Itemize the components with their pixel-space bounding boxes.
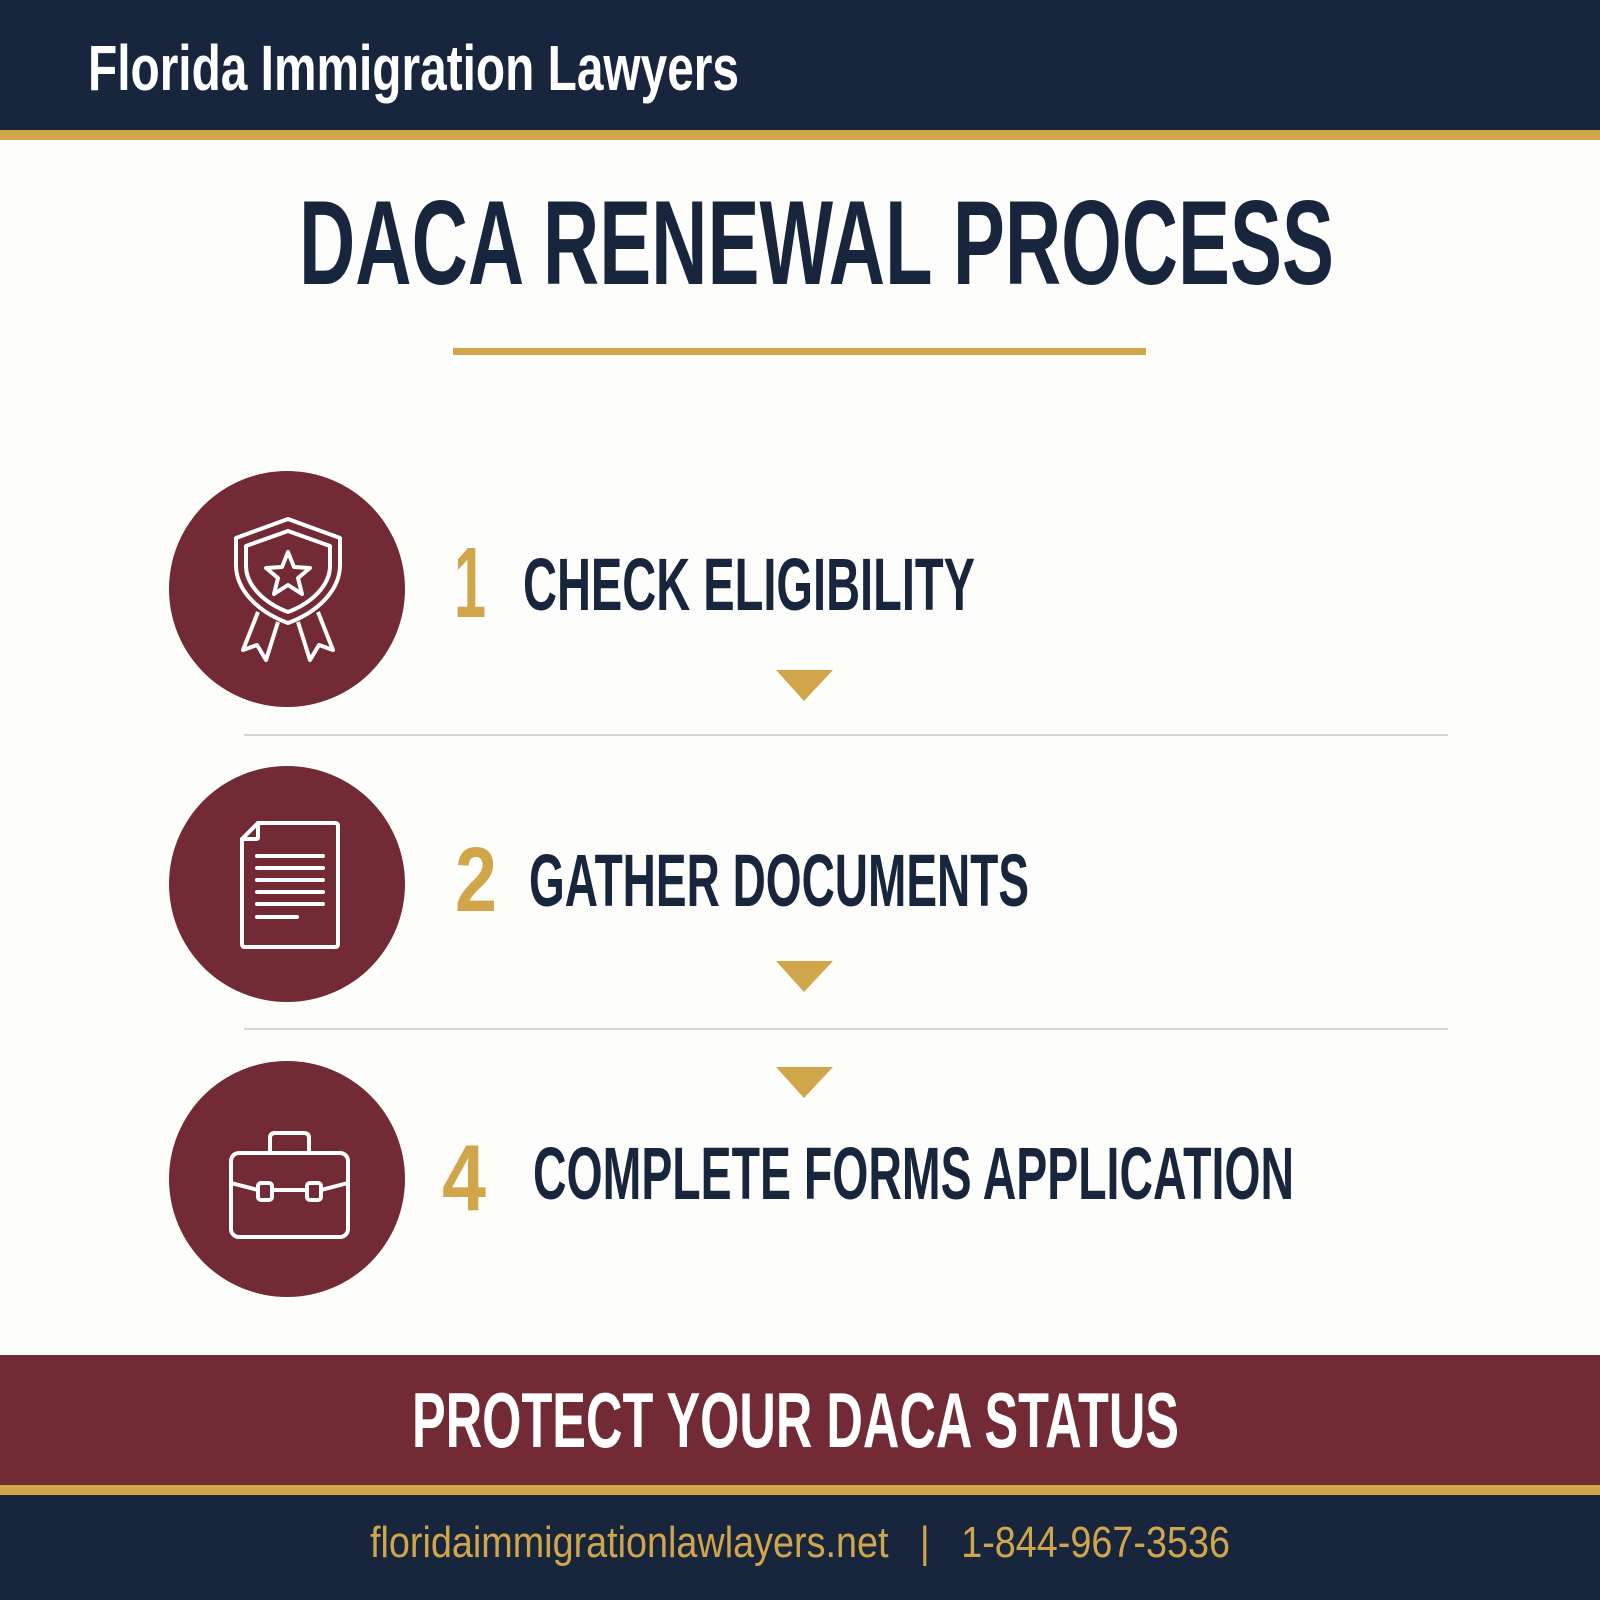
icon: briefcase [169, 1061, 405, 1297]
arrow 1 [776, 670, 833, 701]
banner: protect status: PROTECT YOUR DACA STATUS [412, 1376, 1179, 1464]
icon: document [169, 766, 405, 1002]
step 2 [169, 766, 1029, 1002]
banner: protect status [0, 1355, 1600, 1485]
title underline [453, 348, 1146, 355]
step 1 [169, 471, 975, 707]
header text: Florida Immigration Lawyers [88, 32, 739, 104]
number 2: 2 [455, 829, 497, 931]
label: CHECK ELIGIBILITY [523, 543, 975, 626]
number 4: 4 [442, 1125, 486, 1230]
number 1: 1 [454, 527, 486, 639]
footer [0, 1495, 1600, 1600]
label: GATHER DOCUMENTS [529, 839, 1029, 922]
arrow 2 [776, 961, 833, 992]
arrow 3 [776, 1067, 833, 1098]
step 3 [169, 1061, 1294, 1297]
icon: shield badge [169, 471, 405, 707]
footer: floridaimmigrationlawlayers.net | 1-844-967-3536 [370, 1518, 1230, 1567]
header bar [0, 0, 1600, 140]
